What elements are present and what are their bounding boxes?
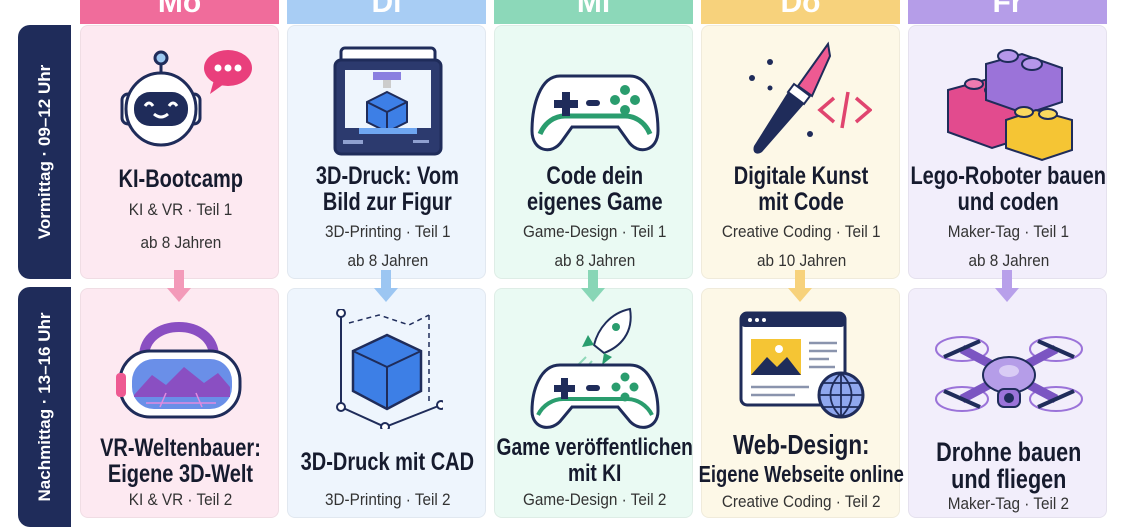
title: Code dein bbox=[546, 162, 643, 190]
title: und fliegen bbox=[951, 464, 1066, 494]
icon: CAD cube bbox=[336, 309, 443, 429]
icon: web page and globe bbox=[740, 312, 864, 418]
sidebar: Vormittag bbox=[18, 25, 71, 279]
card: Fr Vormittag bbox=[908, 25, 1107, 279]
title: Lego-Roboter bauen bbox=[911, 162, 1106, 190]
card: Fr Nachmittag bbox=[908, 288, 1107, 518]
arrow: Do bbox=[788, 270, 812, 302]
arrow: Mo bbox=[167, 270, 191, 302]
arrow: Mi bbox=[581, 270, 605, 302]
card: Di Nachmittag bbox=[287, 288, 486, 518]
title: VR-Weltenbauer: bbox=[100, 434, 261, 462]
header: Di bbox=[287, 0, 486, 24]
age: ab 8 Jahren bbox=[554, 251, 635, 270]
subtitle: Creative Coding · Teil 1 bbox=[722, 222, 881, 241]
sidebar: Nachmittag: Nachmittag · 13–16 Uhr bbox=[34, 313, 54, 501]
card: Mo Vormittag bbox=[80, 25, 279, 279]
card: Mo Nachmittag bbox=[80, 288, 279, 518]
title: 3D-Druck: Vom bbox=[316, 162, 459, 190]
title bbox=[316, 162, 459, 216]
card: Mi Vormittag bbox=[494, 25, 693, 279]
title bbox=[527, 162, 662, 216]
title bbox=[496, 434, 693, 487]
icon: robot bbox=[120, 50, 252, 146]
title bbox=[699, 429, 904, 487]
title bbox=[911, 162, 1106, 216]
arrow: Fr bbox=[995, 270, 1019, 302]
header: Mi bbox=[494, 0, 693, 24]
title: eigenes Game bbox=[527, 188, 662, 216]
icon: VR headset bbox=[116, 322, 242, 418]
sidebar: Nachmittag bbox=[18, 287, 71, 527]
subtitle: 3D-Printing · Teil 1 bbox=[325, 222, 450, 241]
sidebar: Vormittag: Vormittag · 09–12 Uhr bbox=[34, 65, 54, 239]
age: ab 8 Jahren bbox=[140, 233, 221, 252]
card: Mi Nachmittag bbox=[494, 288, 693, 518]
title bbox=[734, 162, 869, 216]
card: Di Vormittag bbox=[287, 25, 486, 279]
title: Eigene Webseite online bbox=[699, 461, 904, 487]
icon: drone bbox=[935, 336, 1083, 412]
icon: lego bricks bbox=[947, 49, 1073, 161]
subtitle: 3D-Printing · Teil 2 bbox=[325, 490, 450, 509]
icon: brush and code bbox=[749, 42, 872, 154]
age: ab 8 Jahren bbox=[968, 251, 1049, 270]
title: und coden bbox=[958, 188, 1059, 216]
age: ab 10 Jahren bbox=[757, 251, 846, 270]
title: Bild zur Figur bbox=[323, 188, 452, 216]
subtitle: KI & VR · Teil 2 bbox=[129, 490, 232, 509]
subtitle: Game-Design · Teil 2 bbox=[523, 490, 666, 509]
header: Mo bbox=[80, 0, 279, 24]
title: KI-Bootcamp bbox=[118, 165, 243, 193]
title: Drohne bauen bbox=[936, 437, 1081, 467]
arrow: Di bbox=[374, 270, 398, 302]
title: Eigene 3D-Welt bbox=[108, 460, 253, 488]
title: 3D-Druck mit CAD bbox=[301, 448, 474, 476]
title bbox=[100, 434, 261, 488]
title: Game veröffentlichen bbox=[496, 434, 693, 461]
header: Do bbox=[701, 0, 900, 24]
subtitle: Creative Coding · Teil 2 bbox=[722, 492, 881, 511]
icon: 3D printer bbox=[334, 46, 442, 156]
header: Fr bbox=[908, 0, 1107, 24]
subtitle: Game-Design · Teil 1 bbox=[523, 222, 666, 241]
age: ab 8 Jahren bbox=[347, 251, 428, 270]
subtitle: Maker-Tag · Teil 2 bbox=[948, 494, 1069, 513]
icon: rocket gamepad bbox=[530, 308, 660, 429]
title: mit KI bbox=[568, 460, 621, 487]
card: Do Nachmittag bbox=[701, 288, 900, 518]
subtitle: KI & VR · Teil 1 bbox=[129, 200, 232, 219]
icon: gamepad bbox=[530, 74, 660, 152]
title: Web-Design: bbox=[733, 429, 870, 460]
title bbox=[936, 437, 1081, 494]
title: mit Code bbox=[759, 188, 844, 216]
card: Do Vormittag bbox=[701, 25, 900, 279]
title: Digitale Kunst bbox=[734, 162, 869, 190]
subtitle: Maker-Tag · Teil 1 bbox=[948, 222, 1069, 241]
